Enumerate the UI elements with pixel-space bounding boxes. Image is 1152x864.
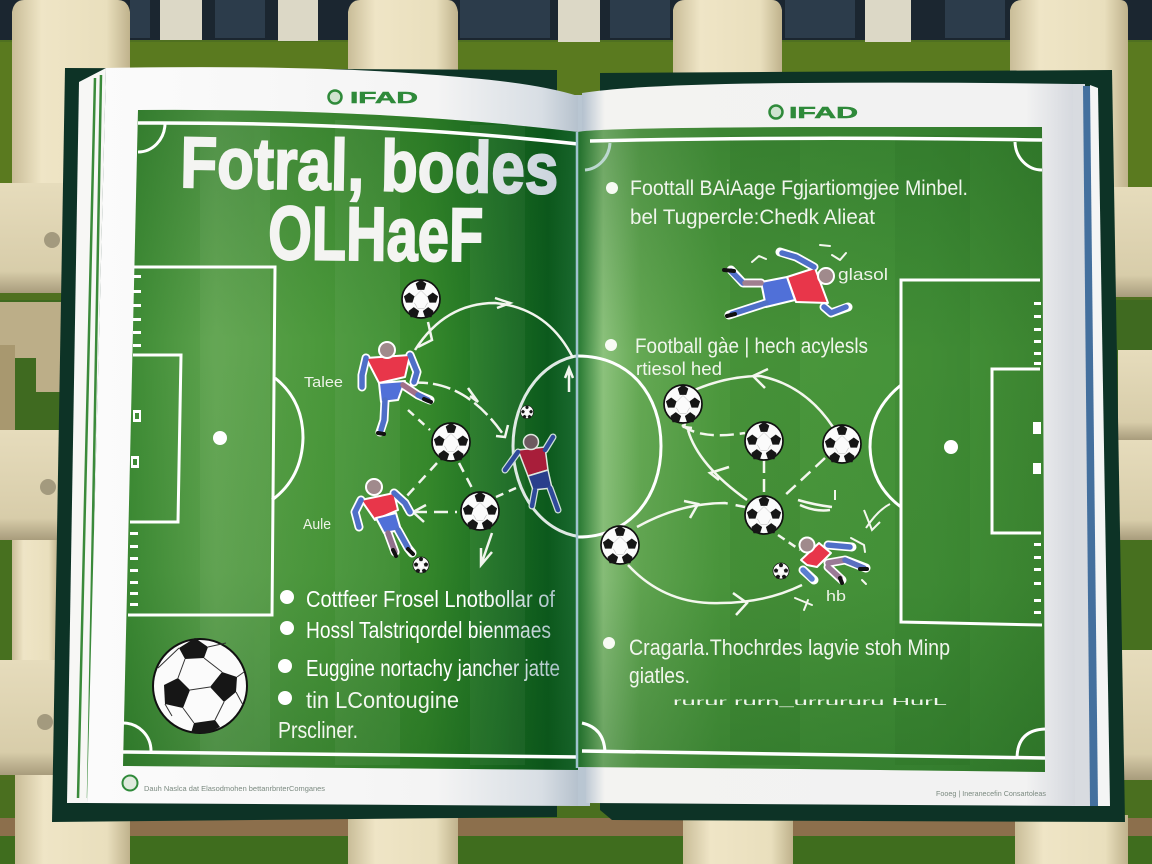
text block: left bullets: Prscliner. [278, 717, 358, 743]
label: player top: glasol [838, 265, 888, 284]
footballs: left [402, 280, 534, 573]
text block: right top bullets: Foottall BAiAage Fgjartiomgjee Minbel. [630, 177, 968, 200]
player: fallen [795, 538, 867, 610]
tactical arrows: left [406, 298, 573, 565]
page stack edges [67, 68, 1110, 806]
gutter line [576, 132, 578, 768]
logo: IFAD: IFAD [350, 90, 418, 107]
panel: left page [87, 67, 661, 806]
text block: right bottom bullet: Cragarla.Thochrdes lagvie stoh Minp [629, 635, 950, 660]
title: OLHaeF [268, 191, 484, 278]
text block: right bottom bullet: rurur rurn_urrururu HurL [673, 697, 948, 708]
title [180, 123, 559, 278]
page sheet [582, 83, 1075, 806]
text block: right bottom bullet: giatles. [629, 663, 690, 688]
text block: right top bullets: Football gàe | hech acylesls [635, 335, 868, 358]
text block: left bullets [278, 586, 560, 743]
footer: left [122, 776, 325, 793]
labels: players: Talee [304, 374, 343, 391]
pitch: left [123, 110, 661, 770]
labels: players: Aule [303, 516, 331, 533]
tactical arrows: right [628, 369, 890, 615]
footballs: right [601, 385, 861, 579]
large football [153, 638, 247, 733]
logo: IFAD [328, 90, 418, 107]
footer: left: Dauh Naslca dat Elasodmohen bettanrbnterComganes [144, 784, 325, 793]
player: lower left [355, 479, 413, 556]
labels: players [303, 374, 343, 533]
text block: left bullets: tin LContougine [306, 687, 459, 713]
panel: right page [577, 83, 1075, 806]
text block: left bullets: Euggine nortachy jancher jatte [306, 655, 560, 681]
footer: right: Fooeg | Ineranecefin Consartoleas [936, 789, 1046, 798]
text block: right top bullets [605, 177, 968, 379]
title: Fotral, bodes [180, 123, 559, 210]
player: upper left [362, 342, 431, 434]
logo: IFAD [770, 105, 858, 122]
logo: IFAD: IFAD [789, 105, 858, 122]
pitch: right [577, 127, 1045, 772]
label: player bottom: hb [826, 588, 846, 605]
penalty spot [944, 440, 958, 454]
gutter [570, 95, 590, 806]
text block: right top bullets: bel Tugpercle:Chedk Alieat [630, 206, 875, 229]
text block: right top bullets: rtiesol hed [636, 359, 722, 379]
page sheet [87, 67, 578, 806]
penalty spot [213, 431, 227, 445]
text block: left bullets: Cottfeer Frosel Lnotbollar of [306, 586, 556, 612]
player: by centre circle [505, 434, 558, 510]
text block: left bullets: Hossl Talstriqordel bienmaes [306, 617, 551, 643]
player: diving [724, 245, 848, 316]
text block: right bottom bullet [603, 635, 950, 708]
